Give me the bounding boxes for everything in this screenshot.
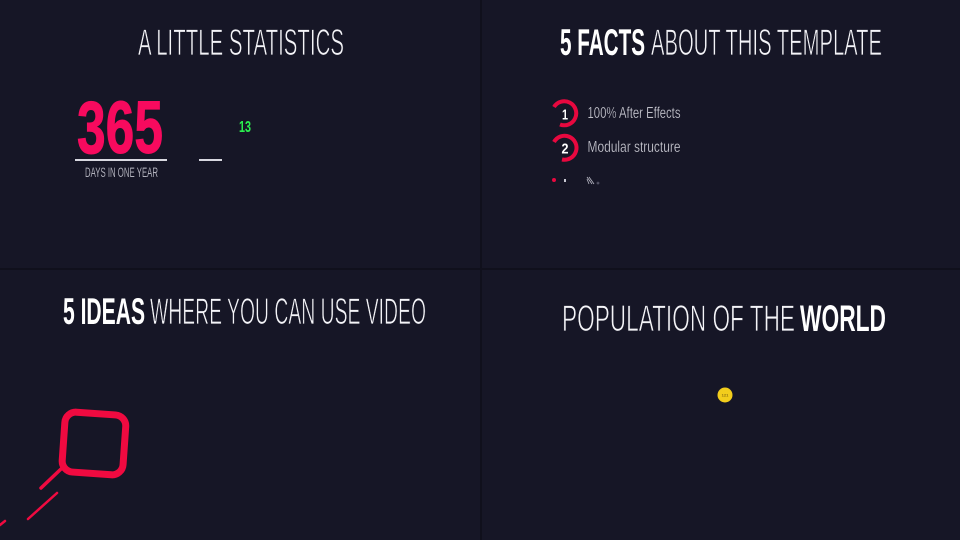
- heading: 5 ideas where you can use video: [63, 291, 426, 332]
- heading: 5 facts about this template: 5 FACTS: [560, 22, 645, 63]
- fact 1: [554, 101, 681, 125]
- panel: a little statistics: [75, 22, 344, 180]
- heading: a little statistics: A LITTLE STATISTICS: [138, 22, 344, 63]
- stat caption: DAYS IN ONE YEAR: [85, 165, 158, 180]
- map marker: yellow dot: 121: [722, 392, 729, 398]
- heading: population of the world: POPULATION OF THE: [562, 298, 795, 339]
- fact 3 animating in: [552, 177, 599, 184]
- heading: 5 facts about this template: [560, 22, 882, 63]
- heading: 5 ideas where you can use video: 5 IDEAS: [63, 291, 145, 332]
- panel: 5 ideas: [0, 291, 426, 525]
- fact 1: 100% After Effects: [588, 105, 681, 122]
- map marker: yellow dot: [718, 388, 732, 402]
- stat number: 365: 365: [77, 86, 163, 169]
- stat underline: [75, 159, 167, 161]
- panel: population of the world: [562, 298, 886, 402]
- fact 1: 1: [562, 106, 568, 124]
- fact 2: [554, 136, 680, 160]
- fact 2: 2: [562, 140, 568, 158]
- second stat number: 13: [239, 119, 251, 136]
- icon: magnifier drawing in: [0, 411, 126, 525]
- heading: 5 ideas where you can use video: WHERE YOU CAN USE VIDEO: [150, 291, 426, 332]
- fact 2: Modular structure: [588, 139, 680, 156]
- panel: 5 facts: [552, 22, 882, 184]
- second stat underline: [199, 159, 222, 161]
- heading: population of the world: WORLD: [800, 298, 886, 339]
